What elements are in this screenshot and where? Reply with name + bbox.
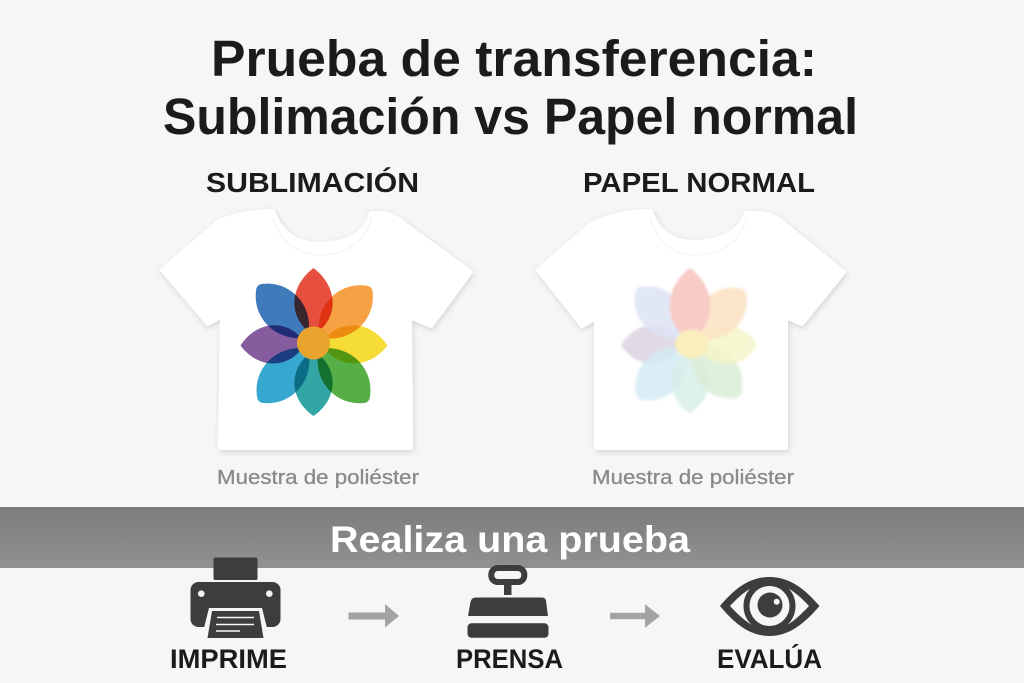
icon: vivid flower — [240, 268, 388, 416]
step: imprime — [170, 558, 287, 674]
title — [163, 30, 858, 145]
banner — [0, 507, 1024, 568]
title: Prueba de transferencia: — [211, 30, 817, 87]
step: prensa — [456, 568, 563, 674]
caption: muestra: Muestra de poliéster — [217, 467, 419, 489]
t-shirt: sublimación — [162, 211, 471, 448]
collar seam — [272, 217, 372, 255]
panel: sublimación — [162, 167, 471, 489]
t-shirt: papel normal — [538, 211, 844, 448]
label: EVALÚA — [717, 643, 822, 674]
heading: papel normal: PAPEL NORMAL — [583, 167, 815, 198]
icon: faded flower — [620, 268, 759, 413]
label: PRENSA — [456, 644, 563, 674]
heading: sublimación: SUBLIMACIÓN — [206, 167, 419, 198]
collar seam — [650, 217, 747, 255]
banner text: Realiza una prueba — [330, 519, 690, 560]
icon: press — [468, 568, 548, 638]
panel: papel normal — [538, 167, 844, 489]
icon: eye — [720, 577, 820, 636]
arrow 1 — [348, 604, 399, 628]
caption: muestra: Muestra de poliéster — [592, 467, 794, 489]
label: IMPRIME — [170, 644, 287, 674]
arrow 2 — [610, 604, 660, 628]
icon: printer — [190, 558, 280, 638]
step: evalúa — [717, 577, 822, 674]
title: Sublimación vs Papel normal — [163, 88, 858, 145]
